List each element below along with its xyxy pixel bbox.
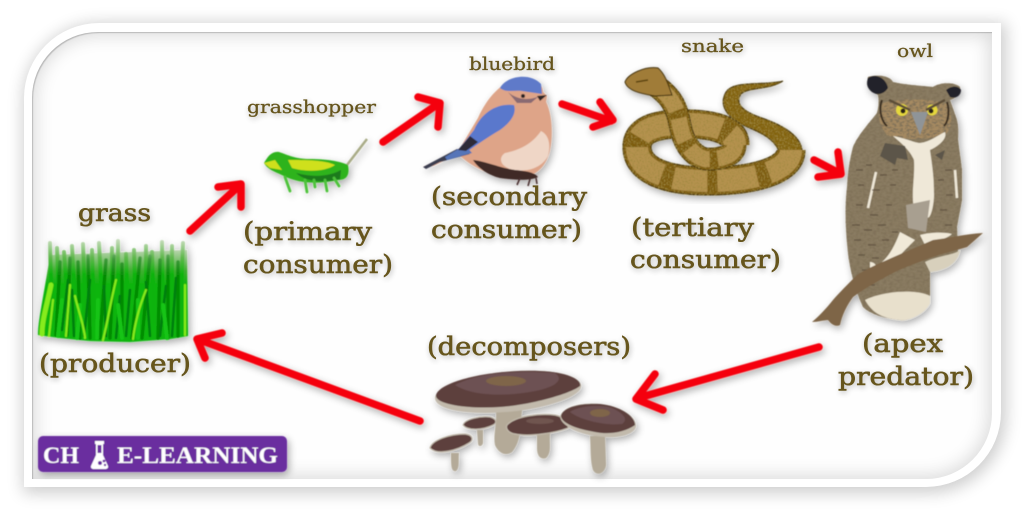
arrow: bluebird to snake [562,102,613,127]
icon: grass [38,241,188,342]
label: grasshopper: grasshopper [247,97,376,118]
label: primary consumer: consumer) [243,250,393,279]
label: owl: owl [897,41,933,62]
logo: CH E-LEARNING: E-LEARNING [117,443,278,468]
label: primary consumer [243,217,393,279]
arrow: grass to grasshopper [190,184,241,231]
label: tertiary consumer: (tertiary [631,213,755,242]
arrow: snake to owl [814,152,841,177]
big mushroom stem [494,410,522,454]
label: decomposers: (decomposers) [427,332,631,361]
arrow: decomposers to grass [197,333,420,421]
logo: CH E-LEARNING [38,436,287,472]
label: secondary consumer [431,182,588,244]
label: tertiary consumer [630,213,781,274]
label: apex predator [838,329,974,391]
label: secondary consumer: consumer) [431,215,582,244]
labels [39,36,974,391]
label: tertiary consumer: consumer) [630,245,781,274]
label: secondary consumer: (secondary [431,182,588,211]
label: apex predator: (apex [862,329,943,358]
icon: snake [625,68,802,181]
label: producer: (producer) [39,349,191,378]
label: snake: snake [681,36,744,57]
logo: CH E-LEARNING: CH [43,443,79,468]
icon: grasshopper [264,139,367,192]
arrows [190,97,841,421]
arrow: grasshopper to bluebird [383,97,440,142]
icon: bluebird [423,77,552,186]
icon: owl [812,76,983,326]
icon: flask [91,441,108,469]
label: apex predator: predator) [838,362,974,391]
label: grass: grass [78,199,151,227]
owl plumage barring [852,165,953,285]
label: primary consumer: (primary [243,217,373,246]
icon: mushrooms [430,371,636,474]
arrow: owl to decomposers [636,347,819,410]
label: bluebird: bluebird [469,54,555,75]
